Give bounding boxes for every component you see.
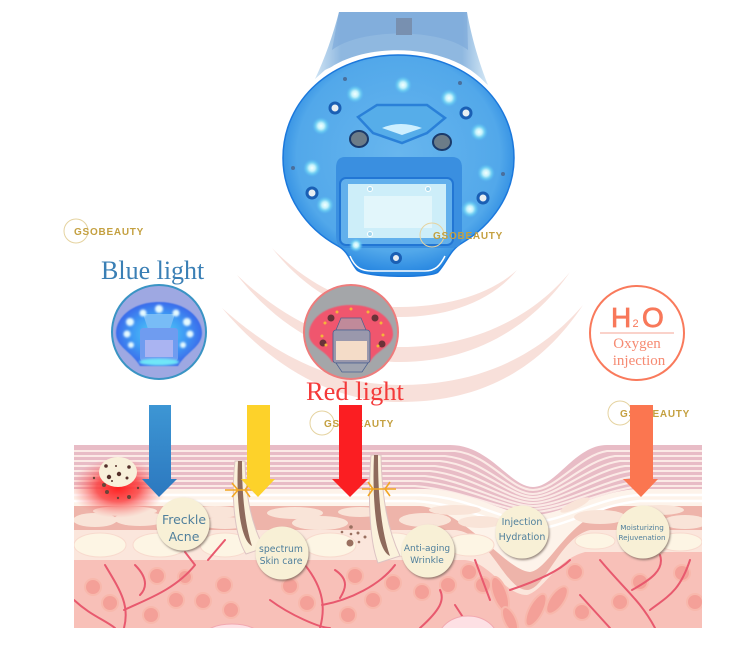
blue light lens [112, 285, 206, 379]
LEDs [303, 76, 495, 252]
logo top left [64, 219, 144, 243]
control diamond [358, 105, 445, 143]
H2O oxygen injection badge: O [642, 302, 664, 333]
stratum corneum [74, 445, 702, 514]
badge: freckle acne [156, 498, 210, 550]
badge: anti-aging wrinkle [402, 524, 454, 578]
badge: injection hydration: Injection [502, 517, 542, 528]
logo on device: GSOBEAUTY [433, 231, 503, 242]
skin cross-section [74, 445, 702, 628]
badge: moisturizing rejuvenation [616, 506, 670, 558]
badge: moisturizing rejuvenation: Rejuvenation [618, 533, 666, 542]
signal arcs [222, 248, 583, 402]
badge: spectrum skin care: spectrum [259, 544, 303, 555]
hair follicle right [362, 455, 400, 563]
heading: red light: Red light [306, 376, 405, 406]
badge: injection hydration: Hydration [499, 532, 545, 543]
white shell [315, 50, 488, 110]
badge: moisturizing rejuvenation: Moisturizing [620, 523, 664, 532]
logo on red arrow: GSOBEAUTY [324, 419, 394, 430]
basal pale cell layer [74, 530, 702, 595]
arrow: orange [623, 405, 658, 497]
dermal papillae [85, 564, 703, 635]
logo on red arrow [310, 411, 394, 435]
arrow: yellow [241, 405, 275, 497]
logo top left: GSOBEAUTY [74, 227, 144, 238]
window housing [336, 157, 462, 248]
dermis [74, 552, 702, 628]
device handle [315, 12, 488, 85]
logo on device [420, 223, 503, 247]
pigment dots [93, 477, 139, 499]
badge: freckle acne: Freckle [162, 512, 206, 527]
hair follicle left [225, 461, 264, 554]
light window [348, 184, 446, 238]
badge: injection hydration [496, 506, 548, 558]
badge: spectrum skin care [256, 526, 308, 580]
H2O oxygen injection badge: H [611, 302, 631, 333]
spinous cell layer [74, 506, 702, 590]
logo behind orange arrow: GSOBEAUTY [620, 409, 690, 420]
heading: blue light: Blue light [101, 256, 205, 285]
H2O oxygen injection badge: injection [613, 353, 666, 369]
arrow: blue [142, 405, 177, 497]
blood vessels [74, 540, 690, 628]
acne glow [74, 460, 163, 516]
badge: anti-aging wrinkle: Wrinkle [410, 556, 444, 566]
pigment cluster [341, 525, 366, 546]
freckle spot [99, 457, 137, 487]
H2O oxygen injection badge [590, 286, 684, 380]
screws [307, 103, 488, 262]
device face [283, 55, 514, 276]
badge: freckle acne: Acne [169, 529, 200, 544]
logo behind orange arrow [608, 401, 690, 425]
device head [283, 12, 514, 276]
arrow: red [332, 405, 368, 497]
badge: spectrum skin care: Skin care [260, 556, 303, 567]
knobs [350, 131, 451, 150]
H2O oxygen injection badge: 2 [632, 318, 639, 330]
subcutaneous fat [210, 616, 494, 628]
red light lens [304, 285, 398, 379]
white granular band [74, 489, 702, 572]
badge: anti-aging wrinkle: Anti-aging [404, 544, 450, 554]
H2O oxygen injection badge: Oxygen [613, 336, 661, 352]
